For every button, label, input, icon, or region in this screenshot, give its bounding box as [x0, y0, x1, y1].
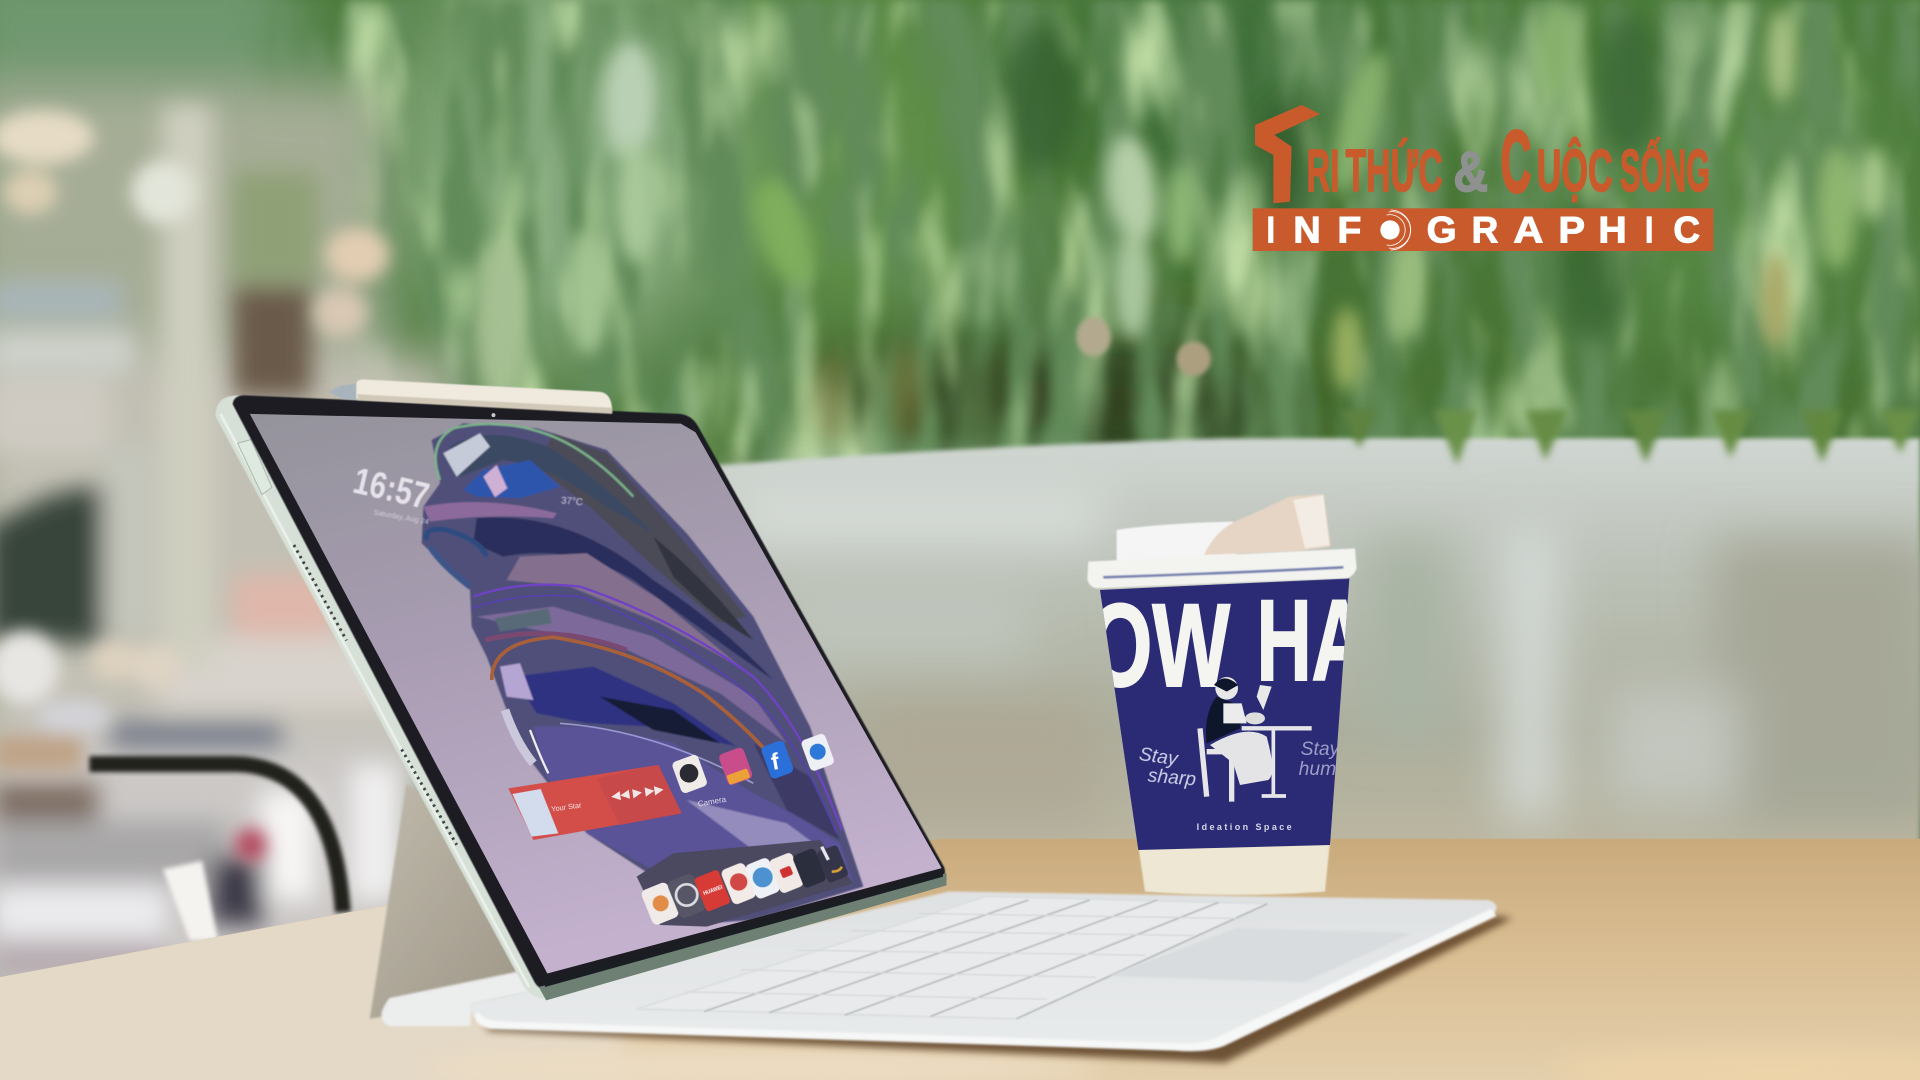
sleeve lettering and illustration: Ideation Space [1197, 822, 1292, 832]
logo infographic banner [1253, 208, 1713, 251]
banner text: F [1337, 210, 1361, 251]
front camera [492, 413, 495, 417]
logo wordmark: RI [1307, 137, 1339, 204]
sleeve lettering and illustration: Stay [1301, 739, 1341, 760]
hanging leaves over wall [1341, 410, 1920, 465]
tablet and keyboard [216, 379, 1496, 1051]
sleeve lettering and illustration: humble [1299, 759, 1362, 780]
cup sleeve [1100, 578, 1349, 850]
tablet frame [216, 396, 545, 998]
banner text [1267, 210, 1700, 251]
logo: Tri Thức & Cuộc Sống Infographic [1253, 105, 1713, 251]
sleeve lettering and illustration: OW [1088, 580, 1230, 712]
upper lid [1117, 522, 1237, 563]
logo wordmark: THỨC [1346, 137, 1443, 204]
banner text: P [1558, 210, 1585, 251]
keyboard keys [637, 896, 1267, 1019]
sleeve lettering and illustration: HA [1257, 577, 1367, 705]
sleeve lettering and illustration: Stay [1138, 744, 1180, 771]
dock [637, 840, 853, 927]
background: blurred street left side [0, 0, 453, 1016]
banner text: R [1472, 210, 1498, 251]
illustration: person at table [1200, 677, 1312, 802]
bokeh dots [1076, 317, 1211, 376]
logo wordmark: SỐNG [1620, 137, 1710, 204]
coffee cup [1087, 494, 1367, 895]
banner text: I [1267, 210, 1275, 251]
keyboard shadow [484, 916, 1512, 1063]
tablet bezel [233, 395, 945, 990]
wooden table [0, 839, 1920, 1080]
red music widget: Your Star [551, 800, 582, 814]
logo wordmark [1307, 112, 1710, 210]
app icons: f [769, 748, 781, 775]
screen artwork: Saturday, Aug 24 [373, 507, 430, 526]
dock: HUAWEI [703, 884, 724, 897]
logo wordmark: UỘC [1537, 137, 1613, 204]
banner text: G [1427, 210, 1457, 251]
banner text: H [1598, 210, 1627, 251]
logo T mark [1255, 105, 1320, 203]
concrete wall [716, 410, 1920, 857]
clock text: 16:57 [350, 460, 433, 517]
keyboard hinge foot [381, 971, 533, 1026]
red music widget [508, 765, 682, 840]
app icons [671, 733, 835, 809]
banner text: I [1645, 210, 1653, 251]
foliage leaves [475, 0, 1888, 410]
tablet lower green edge [539, 873, 947, 1000]
background: foliage [264, 0, 1920, 839]
tablet screen [250, 414, 942, 973]
banner text: N [1293, 210, 1321, 251]
sleeve lettering and illustration [1088, 577, 1367, 832]
tablet side button [238, 440, 272, 495]
bench and chair arch [89, 748, 343, 940]
keyboard stand [370, 784, 539, 1019]
stylus pen [328, 379, 612, 414]
banner text: A [1513, 210, 1543, 251]
logo wordmark: & [1453, 141, 1488, 204]
lid rim [1087, 548, 1357, 588]
logo wordmark: C [1501, 112, 1531, 210]
tablet speaker grilles [294, 545, 457, 845]
banner O emblem [1380, 210, 1411, 250]
dark foliage gaps [818, 12, 1660, 453]
banner text: C [1673, 210, 1700, 251]
screen artwork [350, 423, 863, 927]
keyboard trackpad [1108, 928, 1412, 982]
sleeve lettering and illustration: sharp [1147, 766, 1197, 791]
cup base [1138, 842, 1330, 895]
screen artwork: 37°C [561, 495, 583, 508]
folded paper on lid [1204, 494, 1331, 555]
keyboard body [471, 891, 1496, 1049]
red music widget: ◀◀ ▶ ▶▶ [610, 782, 665, 803]
app icons: Camera [697, 795, 727, 809]
